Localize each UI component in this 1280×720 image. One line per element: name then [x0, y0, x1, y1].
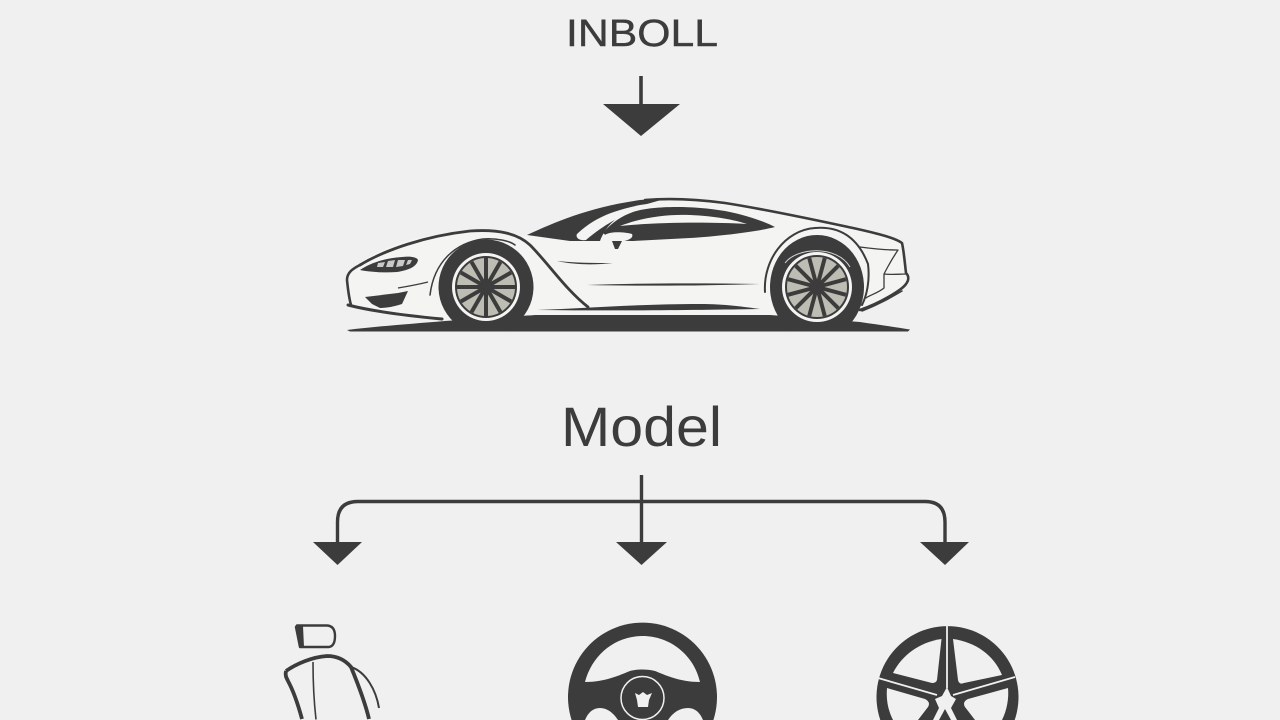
windows: [527, 198, 775, 241]
hub emblem: [635, 692, 652, 707]
car illustration: [347, 198, 910, 332]
title: INBOLL: INBOLL: [566, 13, 718, 55]
arrow: title to car: [603, 76, 680, 136]
icon: steering wheel: [568, 623, 717, 720]
car body: [347, 199, 908, 320]
side body lines: [537, 261, 760, 310]
icon: car seat: [286, 626, 379, 720]
wheel centre star: [933, 687, 957, 720]
arrowhead: center: [616, 542, 667, 565]
branching arrows: [313, 475, 969, 565]
icon: alloy wheel: [876, 626, 1018, 720]
headlight: [360, 257, 418, 272]
side mirror: [605, 232, 632, 249]
front air intake: [365, 282, 428, 308]
ground shadow: [347, 315, 910, 332]
heading: Model: Model: [561, 395, 722, 458]
wheel windows: [893, 639, 942, 683]
arrowhead: right: [920, 542, 969, 565]
spoke highlight lines: [878, 626, 1015, 695]
steering wheel hub: [621, 676, 664, 720]
arrowhead: left: [313, 542, 362, 565]
body outline: [347, 199, 908, 319]
rear wheel: [770, 235, 864, 331]
front wheel: [438, 240, 534, 331]
